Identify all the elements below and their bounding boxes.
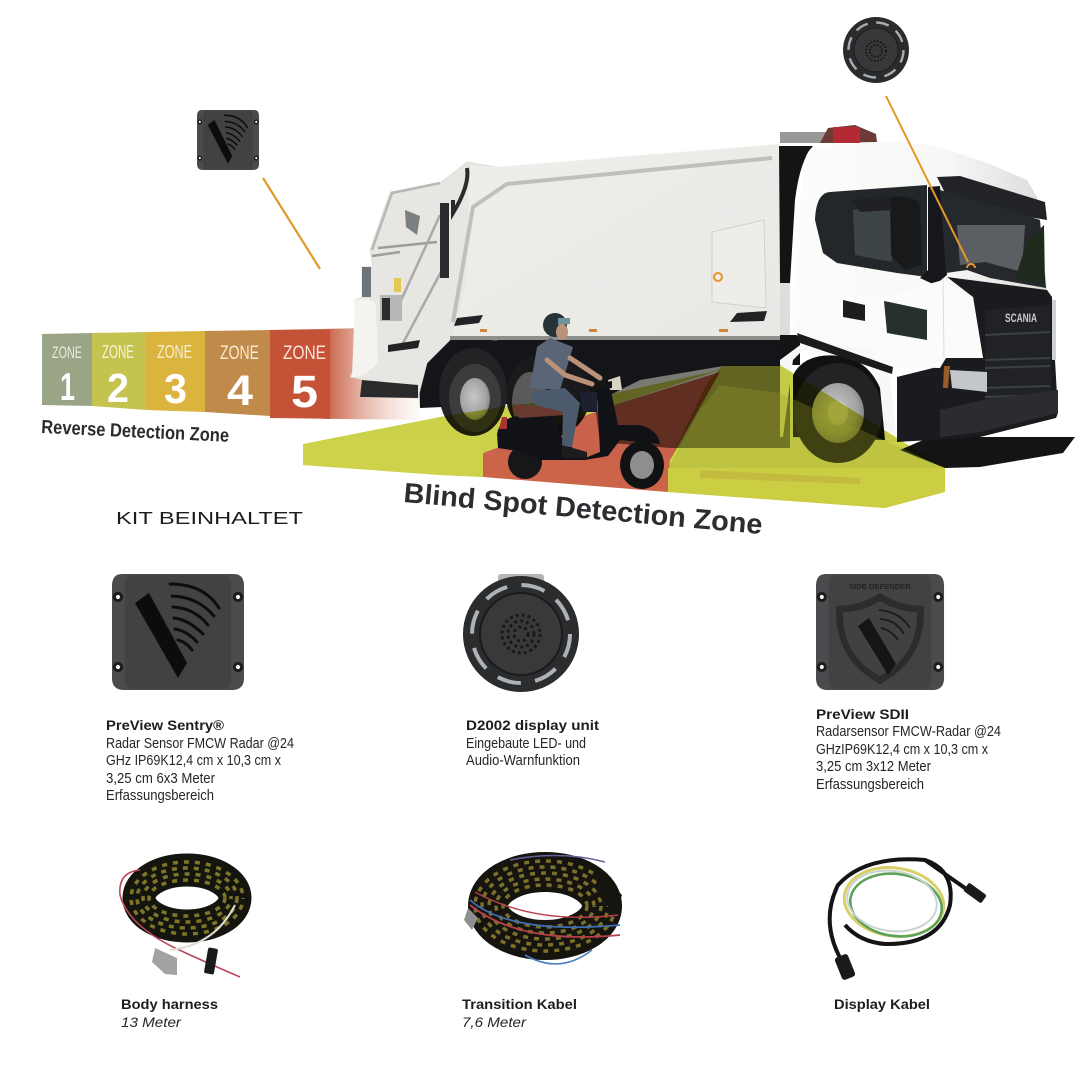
connector end marker	[967, 264, 975, 268]
transition description	[462, 997, 577, 1030]
product: PreView Sentry	[106, 574, 294, 804]
display unit description	[466, 718, 600, 769]
side vents	[884, 301, 927, 340]
rider arms	[547, 358, 600, 384]
harness description	[121, 997, 218, 1030]
SDII description	[816, 707, 1001, 793]
zone 3 label: 3	[164, 365, 187, 412]
hopper rear section	[350, 162, 497, 398]
rear wheels	[439, 348, 590, 438]
zone 4 label: 4	[227, 367, 253, 415]
SDII description: Erfassungsbereich	[816, 777, 924, 793]
zone 5 label	[283, 343, 326, 417]
sensor image	[112, 574, 244, 690]
blind spot zone	[303, 365, 945, 508]
sensor description: Erfassungsbereich	[106, 788, 214, 804]
truck illustration	[350, 125, 1075, 468]
connector line: reverse sensor	[263, 178, 320, 269]
product: display cable	[830, 859, 987, 1012]
heading: blind spot detection zone: Blind Spot Detection Zone	[402, 477, 764, 540]
front wheel	[620, 441, 664, 489]
right zone	[668, 365, 945, 508]
A-pillar	[920, 186, 947, 285]
display unit description: Audio-Warnfunktion	[466, 753, 580, 769]
SDII sensor image	[816, 574, 944, 690]
rider torso	[530, 338, 573, 390]
cab	[790, 142, 1053, 368]
front wheel	[794, 363, 882, 463]
transition description: Transition Kabel	[462, 997, 577, 1012]
display unit description: D2002 display unit	[466, 718, 600, 733]
heading: kit contents: KIT BEINHALTET	[116, 508, 303, 528]
nose and grille	[897, 277, 1058, 442]
SDII description: GHzIP69K12,4 cm x 10,3 cm x	[816, 742, 989, 758]
icon: orange marker	[714, 273, 722, 281]
ground shadow	[900, 437, 1075, 468]
zone 5 label: ZONE	[283, 343, 326, 364]
left zone front band	[303, 434, 483, 477]
display unit image	[463, 574, 579, 692]
sensor description: Radar Sensor FMCW Radar @24	[106, 736, 294, 752]
reverse detection zone bar	[42, 327, 420, 420]
product: PreView SDII	[816, 574, 1001, 793]
SDII description: PreView SDII	[816, 707, 909, 722]
sun visor	[937, 176, 1047, 220]
rider legs	[532, 388, 580, 447]
chassis	[418, 338, 790, 408]
zone 1 label: 1	[60, 366, 75, 409]
transition description: 7,6 Meter	[462, 1015, 527, 1030]
zone 3 label: ZONE	[157, 342, 192, 362]
zone 4 label: ZONE	[220, 343, 259, 364]
zone 4 label	[220, 343, 259, 415]
mirror	[890, 197, 922, 270]
under-truck ground	[590, 366, 790, 448]
roof equipment	[780, 125, 877, 143]
product: body harness	[120, 862, 243, 1030]
headlight	[950, 370, 987, 392]
front wheel arch	[780, 340, 897, 442]
sensor description	[106, 718, 294, 804]
zone 3 label	[157, 342, 192, 412]
sensor icon: reverse radar	[197, 110, 259, 170]
sensor description: GHz IP69K12,4 cm x 10,3 cm x	[106, 753, 282, 769]
windscreen	[940, 190, 1046, 288]
display cable label: Display Kabel	[834, 997, 930, 1012]
rear of cab pillar	[779, 146, 813, 283]
product: transition cable	[462, 855, 622, 1030]
SDII sensor image: SIDE DEFENDER	[849, 584, 911, 591]
scooter	[497, 376, 664, 489]
zone 1 label	[52, 343, 82, 409]
harness description: 13 Meter	[121, 1015, 182, 1030]
zone 2 label	[102, 342, 134, 411]
display unit description: Eingebaute LED- und	[466, 736, 586, 752]
zone 1 label: ZONE	[52, 343, 82, 362]
heading: reverse detection zone: Reverse Detection Zone	[41, 417, 230, 447]
zone 2 label: 2	[107, 365, 129, 411]
SDII description: 3,25 cm 3x12 Meter	[816, 759, 931, 775]
connector line: display unit	[886, 96, 968, 262]
zone 5 label: 5	[291, 366, 318, 417]
left zone surface	[303, 370, 720, 477]
zone 2 label: ZONE	[102, 342, 134, 362]
harness coil image	[120, 862, 243, 977]
brand lettering: SCANIA	[1005, 311, 1037, 325]
product: D2002 display unit	[463, 574, 600, 769]
helmet and head	[543, 313, 567, 337]
rear wheel	[508, 445, 542, 479]
transition coil image	[464, 855, 622, 964]
harness description: Body harness	[121, 997, 218, 1012]
icon: display unit small	[843, 17, 909, 83]
display cable image	[830, 859, 987, 981]
SDII description: Radarsensor FMCW-Radar @24	[816, 724, 1001, 740]
sensor description: 3,25 cm 6x3 Meter	[106, 771, 215, 787]
compactor body	[452, 144, 782, 340]
red zone	[483, 372, 720, 460]
sensor description: PreView Sentry®	[106, 718, 224, 733]
side window	[815, 185, 927, 277]
scooter rider	[497, 313, 664, 489]
